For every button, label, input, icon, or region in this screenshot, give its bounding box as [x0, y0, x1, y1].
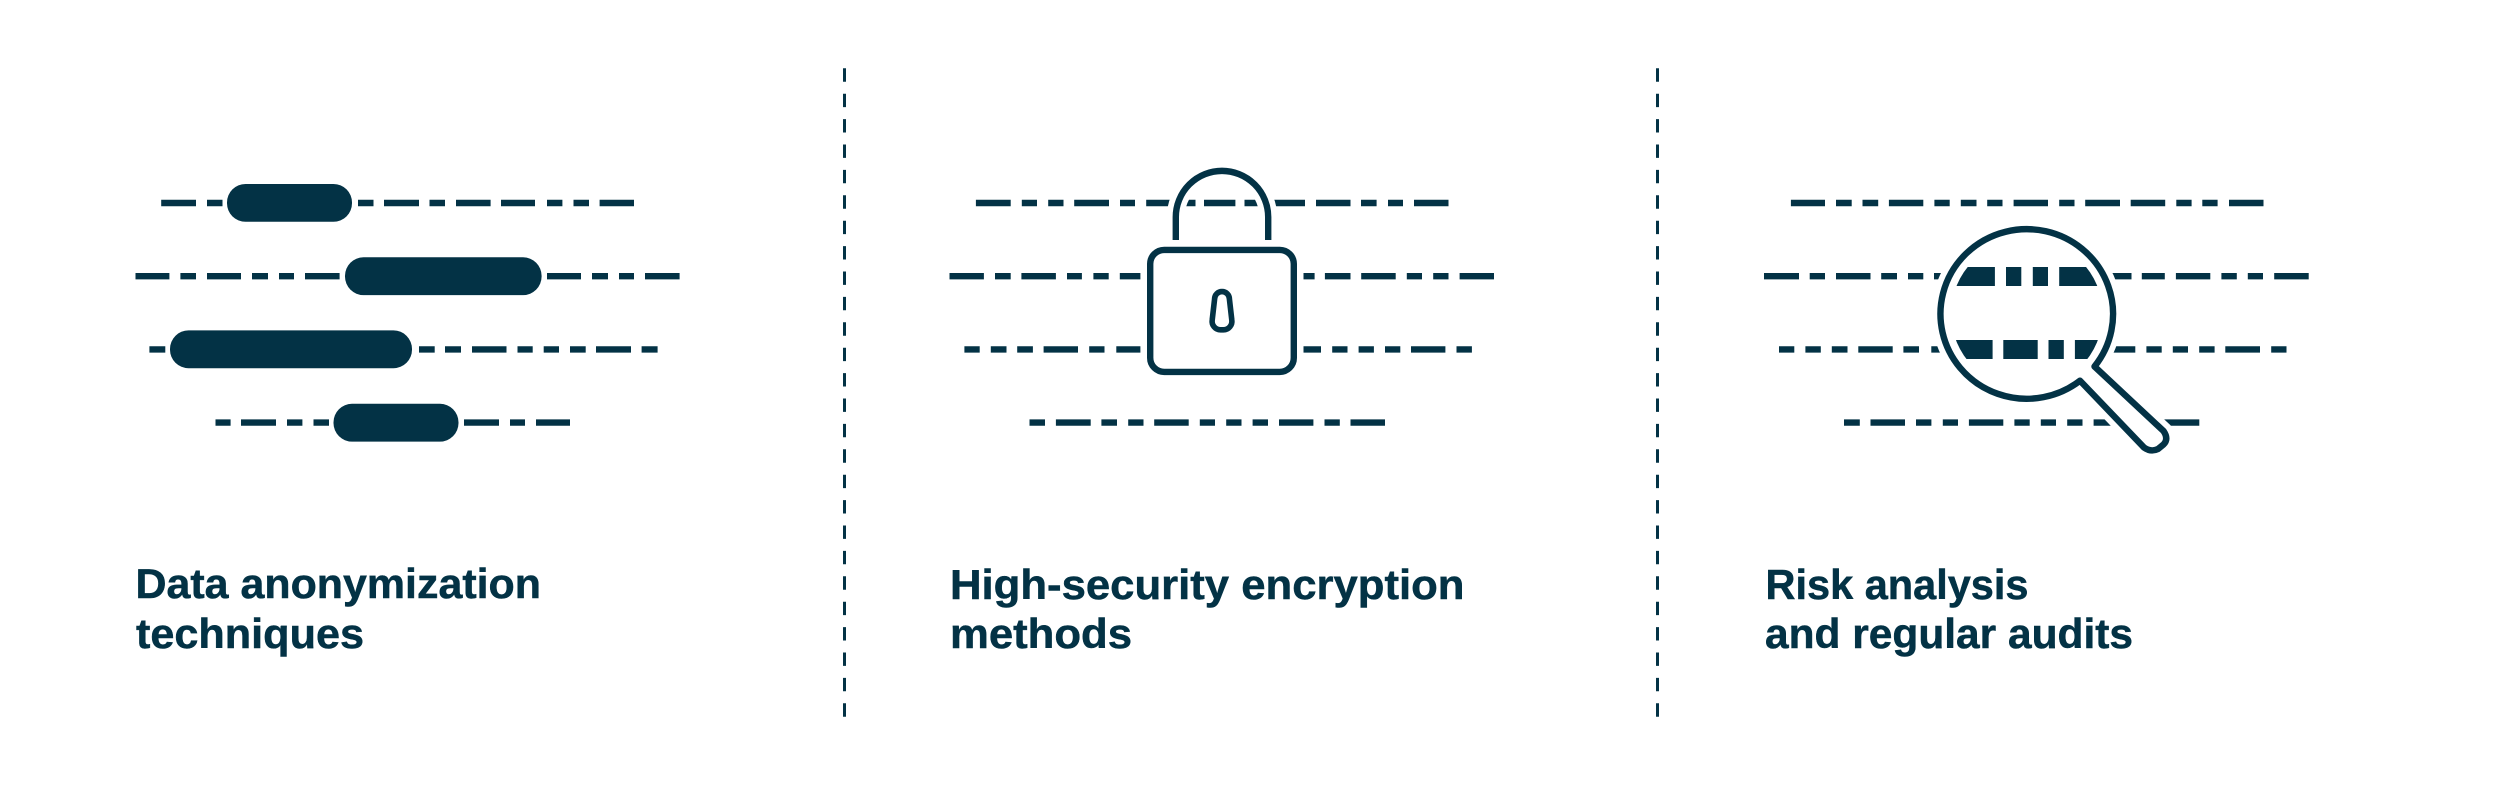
line 3 with redaction pill: [149, 330, 658, 368]
heading: data anonymization: techniques: [136, 610, 364, 657]
heading: data anonymization: [136, 560, 541, 657]
text lines behind magnifier: [1764, 203, 2309, 423]
anonymized text lines icon: [136, 184, 680, 442]
line 4 with redaction pill: [216, 404, 570, 442]
line 2 with redaction pill: [136, 257, 680, 295]
heading: encryption: [950, 561, 1464, 657]
heading: data anonymization: Data anonymization: [136, 560, 541, 607]
heading: risk analysis: and regular audits: [1765, 610, 2133, 657]
heading: risk analysis: Risk analysis: [1766, 561, 2028, 608]
panel: data anonymization: [136, 184, 680, 657]
heading: risk analysis: [1765, 561, 2133, 657]
infographic canvas: [136, 68, 2309, 717]
panel: risk analysis: [1764, 203, 2309, 657]
line 1 with redaction pill: [161, 184, 634, 222]
panel: encryption: [950, 171, 1494, 657]
divider: [1656, 68, 1659, 717]
icon: magnifying glass: [1940, 229, 2166, 450]
text lines behind lock: [950, 203, 1494, 423]
keyhole: [1212, 292, 1232, 330]
heading: encryption: High-security encryption: [950, 561, 1464, 608]
magnified text lines: [1956, 267, 2098, 359]
heading: encryption: methods: [950, 610, 1132, 657]
icon: padlock: [1150, 171, 1294, 372]
divider: [843, 68, 846, 717]
